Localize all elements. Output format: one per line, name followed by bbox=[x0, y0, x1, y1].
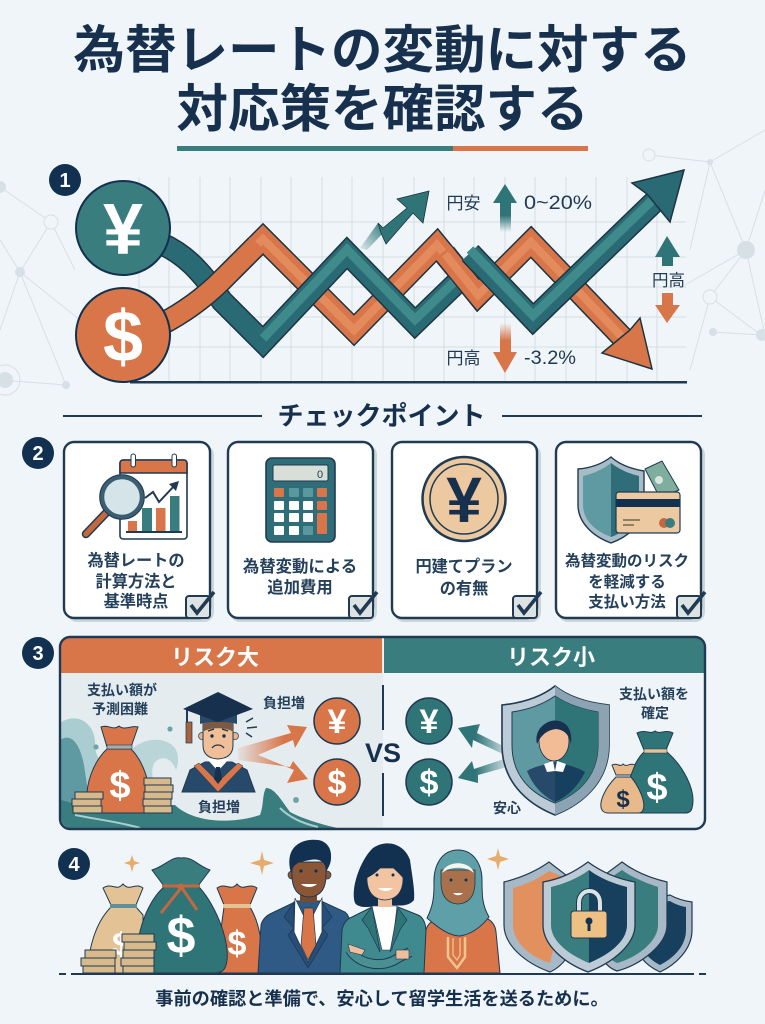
title bbox=[73, 21, 692, 138]
icon: shield money card bbox=[578, 457, 680, 543]
teal zigzag rising part bbox=[160, 243, 472, 342]
text bbox=[565, 551, 689, 611]
badge 2 bbox=[22, 437, 54, 469]
text: 為替レートの bbox=[87, 552, 185, 570]
icon: calculator bbox=[266, 458, 335, 542]
orange dollar coin: $ bbox=[328, 764, 347, 802]
teal yen coin: ¥ bbox=[420, 703, 439, 741]
orange bag: $ bbox=[228, 925, 247, 963]
text: 円建てプラン bbox=[415, 558, 513, 576]
arrow up bbox=[493, 184, 517, 232]
title: 対応策を確認する bbox=[176, 80, 589, 138]
icon: protective shield person bbox=[502, 686, 609, 815]
orange yen coin bbox=[314, 698, 360, 744]
checkbox bbox=[513, 592, 541, 618]
header left bbox=[61, 638, 382, 673]
checkbox bbox=[186, 592, 214, 618]
waves bbox=[60, 718, 337, 828]
yen circle: ¥ bbox=[103, 190, 143, 270]
dollar circle: $ bbox=[103, 297, 143, 377]
card 3: yen plan bbox=[392, 442, 541, 622]
label: burden up top: 負担増 bbox=[263, 695, 305, 711]
label: fix payment bbox=[619, 686, 689, 721]
sparkles bbox=[124, 848, 509, 875]
teal arrow head bbox=[632, 170, 684, 222]
orange arrow head bbox=[602, 318, 652, 369]
panel: risk comparison bbox=[60, 637, 705, 829]
label: unpredictable bbox=[87, 682, 157, 717]
text: の有無 bbox=[440, 580, 488, 598]
teal bag bbox=[138, 858, 227, 973]
icon: teal money bag bbox=[628, 731, 693, 813]
badge 4 bbox=[58, 848, 90, 880]
label: peace of mind: 安心 bbox=[493, 800, 521, 816]
card 2: extra cost bbox=[228, 442, 377, 622]
right indicator bbox=[652, 236, 685, 323]
orange overlap segments bbox=[160, 244, 499, 325]
icon: calculator: 0 bbox=[317, 469, 323, 481]
icon: worried student bbox=[182, 692, 257, 792]
coin stacks bbox=[81, 934, 156, 973]
icon: small tan money bag bbox=[601, 764, 644, 813]
orange yen coin: ¥ bbox=[328, 703, 347, 741]
dollar circle bbox=[76, 288, 170, 382]
badge 4: 4 bbox=[68, 854, 80, 876]
label: yen strong: 円高 bbox=[446, 349, 480, 368]
divider and VS bbox=[365, 685, 401, 816]
title underline bbox=[177, 146, 588, 151]
title: 為替レートの変動に対する bbox=[73, 21, 692, 79]
badge 1 bbox=[49, 164, 81, 196]
right indicator: 円高 bbox=[652, 271, 685, 290]
label: unpredictable: 予測困難 bbox=[92, 701, 148, 717]
orange bag bbox=[215, 884, 262, 973]
icon: orange money bag: $ bbox=[109, 765, 131, 807]
checkbox bbox=[677, 592, 705, 618]
badge 3: 3 bbox=[32, 643, 44, 665]
badge 2: 2 bbox=[32, 443, 44, 465]
icon: yen coin: ¥ bbox=[446, 464, 482, 536]
text: を軽減する bbox=[588, 573, 666, 591]
arrows from shield bbox=[458, 724, 507, 783]
icon group: money bags and coins bbox=[81, 858, 262, 973]
label: 0 to 20 percent: 0~20% bbox=[524, 193, 592, 214]
label: minus 3.2 percent: -3.2% bbox=[524, 348, 576, 369]
arrows to orange coins bbox=[238, 725, 308, 783]
checkbox bbox=[349, 592, 377, 618]
label: yen weak: 円安 bbox=[446, 194, 480, 213]
checkpoint heading: チェックポイント bbox=[277, 401, 486, 431]
icon: orange money bag bbox=[87, 726, 150, 813]
text bbox=[243, 557, 357, 597]
small rising arrow bbox=[360, 191, 429, 250]
text: 基準時点 bbox=[104, 592, 168, 611]
orange dollar coin bbox=[314, 759, 360, 805]
yen circle bbox=[76, 181, 170, 275]
arrow down bbox=[493, 323, 517, 373]
card 1: rate calculation bbox=[64, 442, 214, 622]
label: burden up bottom: 負担増 bbox=[198, 799, 240, 815]
icon: small tan money bag: $ bbox=[616, 786, 630, 813]
teal bag: $ bbox=[167, 907, 196, 965]
header right: リスク小 bbox=[507, 645, 595, 670]
icon: yen coin bbox=[422, 457, 506, 541]
icon: shields with lock bbox=[504, 862, 692, 972]
teal yen coin bbox=[406, 698, 452, 744]
icon: coin stacks bbox=[72, 778, 173, 813]
card 4: payment method bbox=[556, 442, 705, 622]
closing caption: 事前の確認と準備で、安心して留学生活を送るために。 bbox=[155, 988, 609, 1009]
icon: woman in teal jacket bbox=[340, 843, 428, 973]
orange zigzag line bbox=[160, 239, 622, 337]
teal dollar coin bbox=[406, 759, 452, 805]
label: unpredictable: 支払い額が bbox=[87, 682, 157, 698]
label: fix payment: 確定 bbox=[641, 705, 669, 721]
text: 計算方法と bbox=[96, 572, 176, 591]
icon: woman in hijab bbox=[424, 850, 500, 973]
badge 3 bbox=[22, 637, 54, 669]
text: 為替変動による bbox=[243, 557, 357, 576]
icon: teal money bag: $ bbox=[646, 767, 668, 809]
header right bbox=[384, 638, 704, 673]
divider and VS: VS bbox=[365, 738, 401, 768]
text: 為替変動のリスク bbox=[565, 551, 689, 570]
teal dollar coin: $ bbox=[420, 764, 439, 802]
teal zigzag final part bbox=[470, 198, 654, 319]
label: fix payment: 支払い額を bbox=[619, 686, 689, 702]
text: 追加費用 bbox=[267, 579, 333, 597]
tan bag bbox=[89, 884, 143, 973]
text bbox=[415, 558, 513, 598]
icon: calendar chart magnifier bbox=[86, 454, 187, 539]
header left: リスク大 bbox=[171, 645, 259, 670]
panel: exchange rate chart bbox=[76, 170, 687, 384]
icon: man in suit bbox=[258, 840, 350, 973]
text bbox=[87, 552, 185, 611]
badge 1: 1 bbox=[59, 170, 71, 192]
text: 支払い方法 bbox=[588, 592, 666, 611]
ground line bbox=[59, 973, 706, 975]
baseline bbox=[130, 381, 687, 384]
tan bag: $ bbox=[112, 926, 130, 962]
